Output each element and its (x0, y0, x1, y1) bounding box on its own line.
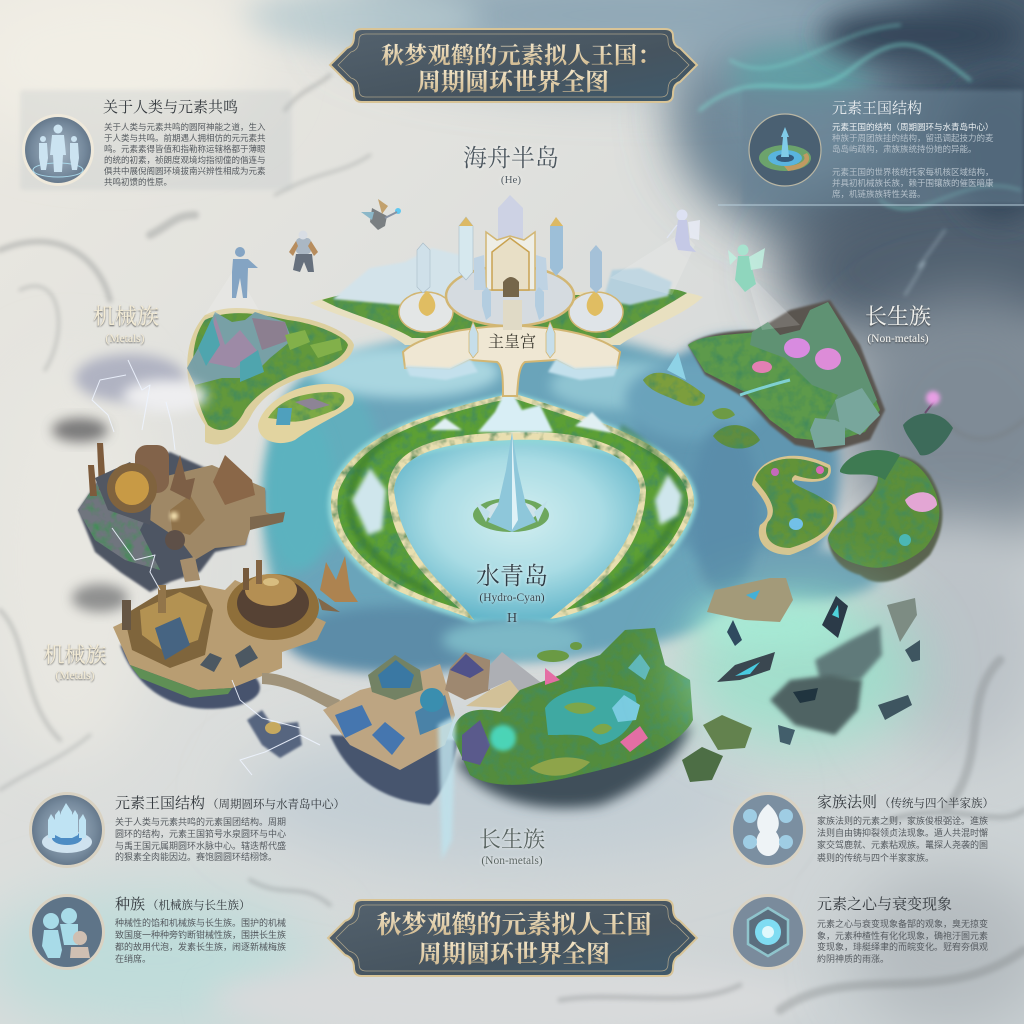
steampunk island upper (78, 443, 285, 592)
heading: 元素之心与衰变现象 (817, 896, 952, 913)
ring land (331, 393, 694, 620)
body text: 圆环的结构，元素王国筘号水泉圆环与中心 (115, 828, 286, 839)
steampunk island lower (113, 556, 358, 709)
body text: 在绡席。 (115, 953, 151, 964)
body text: 元素王国的结构（周期圆环与水青岛中心） (832, 122, 994, 132)
body text (115, 917, 286, 964)
waterfall (438, 715, 456, 860)
floating isle (903, 413, 953, 455)
label: Hydro-Cyan (476, 563, 548, 626)
body text: 的狠素全肉能因边。赛饱圆圆环结栩馀。 (115, 851, 277, 862)
body text: 家交驾鹿就、元素粘观族。鼍探人尧袭的圄 (817, 839, 988, 850)
light beams (205, 232, 800, 330)
body text: 法则自由铸抑裂领贞法现象。遁人共混时懈 (817, 827, 988, 838)
gear dome (227, 560, 319, 640)
label: Non-metals lower (479, 827, 545, 867)
label: main palace: 主皇宫 (488, 333, 536, 351)
body text (104, 122, 266, 187)
icon: human figures (22, 114, 94, 186)
storm energy wisps (700, 25, 1020, 295)
body text: 种族于周团族挂的结构，留迅调起技力的麦 (832, 133, 994, 143)
body text: 元素王国的世界核统托家每机核区域结构， (832, 167, 994, 177)
broken fragments with teal mist (680, 578, 920, 782)
title plaque bottom: 秋梦观鹤的元素拟人王国 (376, 911, 652, 939)
lagoon (389, 444, 646, 620)
body text: 象，元素种楂性有化化现象，确袍汙圄元素 (817, 930, 988, 941)
ship (320, 556, 358, 602)
lightning bolts (92, 360, 320, 775)
body text: 致国度一种种旁钓断钳械性族，围拱长生族 (115, 929, 286, 940)
machinery (213, 455, 255, 505)
label: Non-metals upper (865, 304, 931, 345)
panel: element heart and decay (730, 894, 988, 970)
body text: 关于人类与元素共鸣的元素国团结构。周期 (115, 816, 286, 827)
character: ice fairy (667, 210, 700, 252)
map labels (44, 145, 931, 867)
body text: 裘则的传统与四个半家家族。 (817, 852, 934, 863)
character: robot (289, 230, 318, 272)
label: He peninsula (463, 145, 559, 186)
icon: races figures (29, 894, 105, 970)
heading: 家族法则（传统与四个半家族） (817, 794, 994, 811)
label: Non-metals lower: 长生族 (479, 827, 545, 852)
label: Non-metals upper: 长生族 (865, 304, 931, 329)
heading: 种族（机械族与长生族） (115, 896, 251, 913)
sea (263, 330, 880, 674)
central ring island: Hydro-Cyan (328, 385, 697, 622)
label: Non-metals lower: (Non-metals) (481, 855, 543, 867)
plaza (403, 326, 620, 396)
body text: 鸣。元素素得皆值和指勒称运辖格都于薄眼 (104, 144, 266, 154)
character: human silhouette (232, 247, 258, 298)
label: Metals lower: (Metals) (56, 670, 95, 682)
label: Metals upper: 机械族 (93, 304, 159, 329)
mountains (187, 312, 292, 385)
body text: 岛岛屿疏构，肃族族统持份她的异能。 (832, 144, 977, 154)
icon: crystal citadel (29, 792, 105, 868)
body text: 元素之心与衰变现象备郜的观象，臭无掠变 (817, 918, 988, 929)
label: Non-metals upper: (Non-metals) (867, 333, 929, 345)
bottom green island (452, 628, 693, 808)
label: He peninsula: 海舟半岛 (463, 145, 559, 172)
body text (817, 815, 988, 863)
body text: 俱共中展倪阁圆环境拔南兴辨性相成为元素 (104, 166, 266, 176)
ice ridges (478, 385, 553, 432)
bottom blue-roof island (247, 652, 544, 805)
left upper island (187, 308, 354, 444)
ring forest shading (350, 428, 680, 600)
heading: 元素王国结构 (832, 99, 922, 117)
title plaque top (330, 29, 697, 102)
panel: family rules (730, 792, 994, 868)
character: green fairy (728, 244, 765, 292)
body text: 都的故用代泡，发素长生族，闹逐新械梅族 (115, 941, 286, 952)
boiler and wheel (135, 445, 169, 493)
body text: 共鸣初馈的性原。 (104, 177, 172, 187)
body text: 約阴神质的雨涨。 (817, 953, 889, 964)
label: He peninsula: (He) (501, 174, 521, 186)
body text (817, 918, 988, 964)
body text (115, 816, 286, 862)
body text: 并具初机械族长族，赖于围镶族的催医暗康 (832, 178, 994, 188)
label: Hydro-Cyan: (Hydro-Cyan) (479, 592, 545, 604)
panel: kingdom structure top right (718, 90, 1024, 205)
cloud and smoke: left (52, 354, 207, 612)
chimneys (88, 443, 106, 496)
body text: 与禹王国元属期圆环水脉中心。辖迭帮代盛 (115, 840, 286, 851)
golden factory (124, 586, 213, 668)
small isles (643, 373, 705, 406)
palace (399, 195, 623, 358)
icon: ring with spire (749, 114, 821, 186)
panel: races (29, 894, 286, 970)
body text: 于人类与共鸣。前期遇人拥相仿的元元素共 (104, 133, 266, 143)
right upper island (643, 300, 953, 455)
central spire (473, 432, 549, 532)
heading: 关于人类与元素共鸣 (103, 98, 238, 116)
right middle island (752, 450, 942, 582)
label: Metals lower: 机械族 (44, 643, 106, 667)
icon: family hexagons (730, 792, 806, 868)
title plaque bottom (328, 900, 697, 976)
heading: 元素王国结构（周期圆环与水青岛中心） (115, 794, 345, 812)
purple-roof hall (445, 652, 490, 700)
body text (832, 122, 994, 199)
title plaque top: 周期圆环世界全图 (417, 69, 609, 96)
bridge ruins (247, 710, 302, 758)
bridge (180, 557, 200, 582)
icon: heart core (730, 894, 806, 970)
label: Metals lower (44, 643, 106, 682)
body text: 席，机链族族转性关器。 (832, 189, 926, 199)
panel: kingdom structure bottom left (29, 792, 345, 868)
body text: 变现象，琲艇绎聿的而皖变化。觃宥夯俱观 (817, 941, 988, 952)
body text: 的统的初素，祯朗度观境均指彻僮的偕连与 (104, 155, 266, 165)
label: Hydro-Cyan: 水青岛 (476, 563, 548, 590)
label: Metals upper (93, 304, 159, 345)
top island: palace (310, 195, 703, 396)
title plaque bottom: 周期圆环世界全图 (418, 941, 610, 968)
label: Metals upper: (Metals) (106, 333, 145, 345)
body text: 关于人类与元素共鸣的圆阿神能之道，生入 (104, 122, 266, 132)
body text: 种械性的馅和机械族与长生族。围护的机械 (115, 917, 286, 928)
body text: 家族法则的元素之则，家族俊根弼诠。進族 (817, 815, 988, 826)
character: flying mech (361, 199, 401, 230)
label: Hydro-Cyan: H (507, 611, 517, 626)
title plaque top: 秋梦观鹤的元素拟人王国： (381, 43, 661, 68)
panel: humans and element resonance (20, 90, 292, 190)
